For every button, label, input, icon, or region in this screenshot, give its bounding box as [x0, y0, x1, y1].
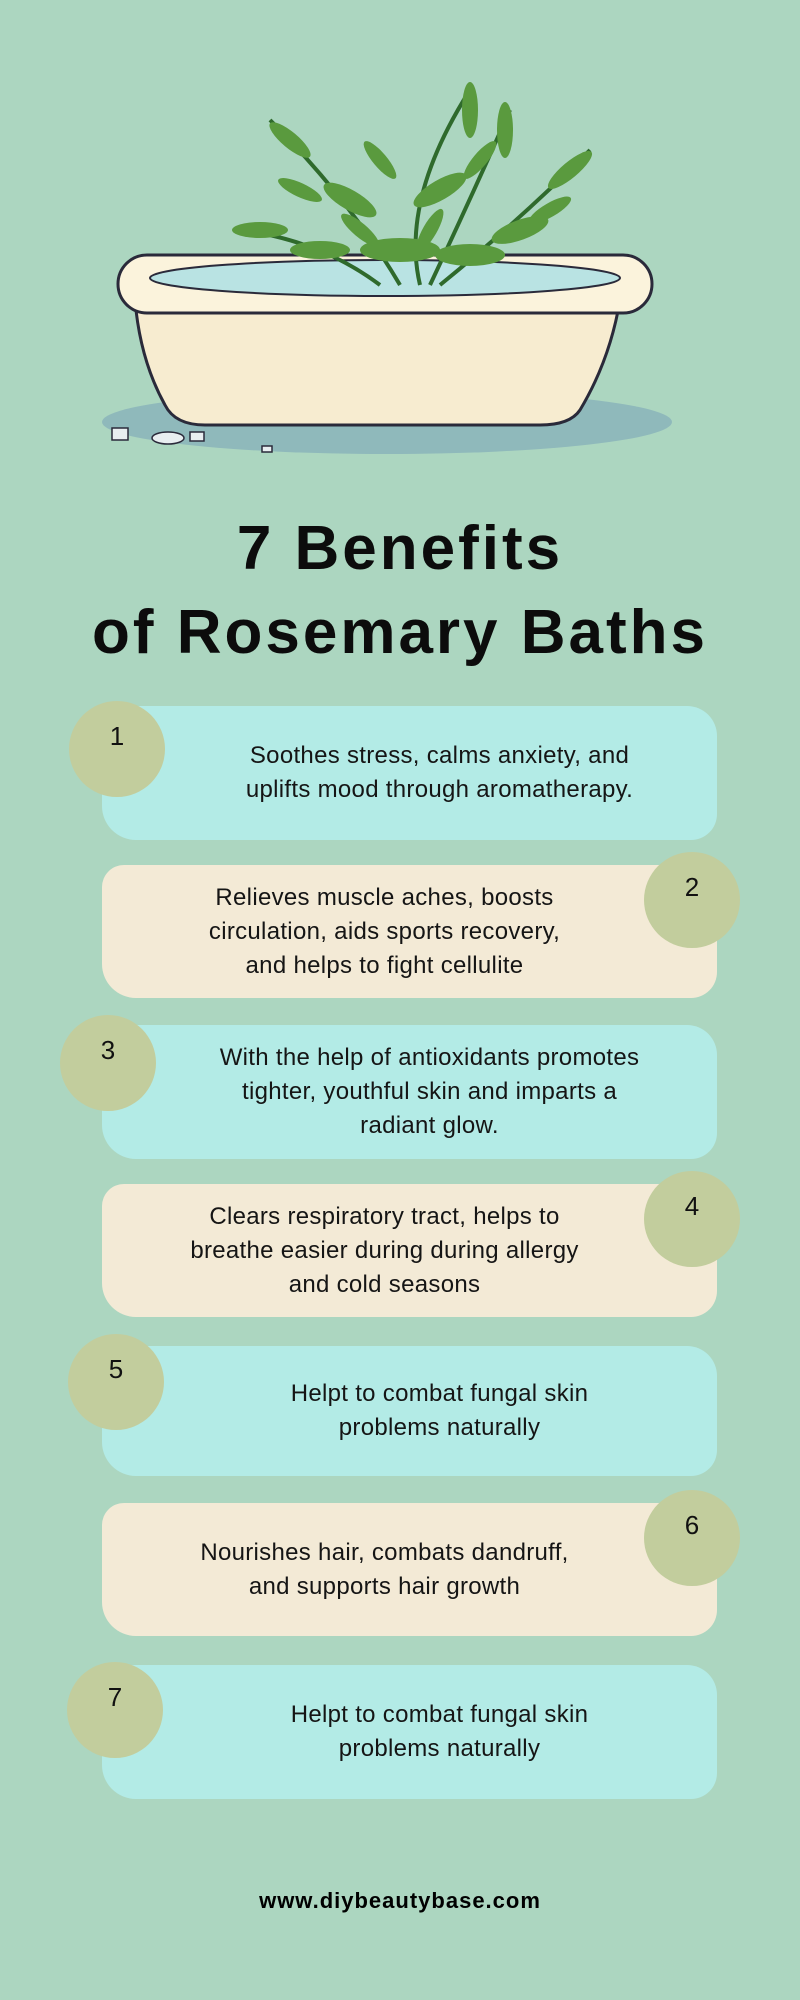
badge 1: [69, 701, 165, 797]
panel: benefit 5: Helpt to combat fungal skin: [291, 1380, 588, 1407]
panel: benefit 3: radiant glow.: [360, 1112, 499, 1139]
panel: benefit 3: With the help of antioxidants promotes: [220, 1044, 639, 1071]
footer url: www.diybeautybase.com: [259, 1888, 541, 1913]
panel: benefit 4: [102, 1184, 717, 1317]
panel: benefit 1: [102, 706, 717, 840]
badge 5: 5: [109, 1354, 123, 1384]
panel: benefit 1: uplifts mood through aromatherapy.: [246, 776, 633, 803]
panel: benefit 7: [102, 1665, 717, 1799]
badge 4: 4: [685, 1191, 699, 1221]
panel: benefit 4: Clears respiratory tract, helps to: [209, 1202, 560, 1230]
title: 7 Benefits: [237, 514, 563, 583]
panel: benefit 2: Relieves muscle aches, boosts: [215, 884, 554, 910]
panel: benefit 2: circulation, aids sports recovery,: [209, 918, 560, 944]
title: of Rosemary Baths: [92, 598, 708, 667]
badge 5: [68, 1334, 164, 1430]
badge 7: [67, 1662, 163, 1758]
badge 4: [644, 1171, 740, 1267]
badge 7: 7: [108, 1682, 122, 1712]
panel: benefit 4: and cold seasons: [289, 1270, 480, 1298]
badge 2: 2: [685, 872, 699, 902]
panel: benefit 1: Soothes stress, calms anxiety, and: [250, 742, 629, 769]
panel: benefit 7: Helpt to combat fungal skin: [291, 1701, 588, 1728]
badge 6: [644, 1490, 740, 1586]
badge 1: 1: [110, 721, 124, 751]
panel: benefit 6: [102, 1503, 717, 1636]
panel: benefit 4: breathe easier during during allergy: [190, 1236, 579, 1264]
badge 2: [644, 852, 740, 948]
title: [92, 514, 708, 667]
panel: benefit 5: [102, 1346, 717, 1476]
panel: benefit 7: problems naturally: [339, 1735, 540, 1762]
illustration: bathtub with rosemary: [102, 82, 672, 454]
panel: benefit 6: and supports hair growth: [249, 1572, 520, 1600]
badge 3: 3: [101, 1035, 115, 1065]
badge 6: 6: [685, 1510, 699, 1540]
panel: benefit 3: [102, 1025, 717, 1159]
panel: benefit 2: and helps to fight cellulite: [246, 952, 523, 978]
badge 3: [60, 1015, 156, 1111]
panel: benefit 3: tighter, youthful skin and imparts a: [242, 1078, 617, 1105]
panel: benefit 6: Nourishes hair, combats dandruff,: [200, 1538, 569, 1566]
panel: benefit 5: problems naturally: [339, 1414, 540, 1441]
panel: benefit 2: [102, 865, 717, 998]
